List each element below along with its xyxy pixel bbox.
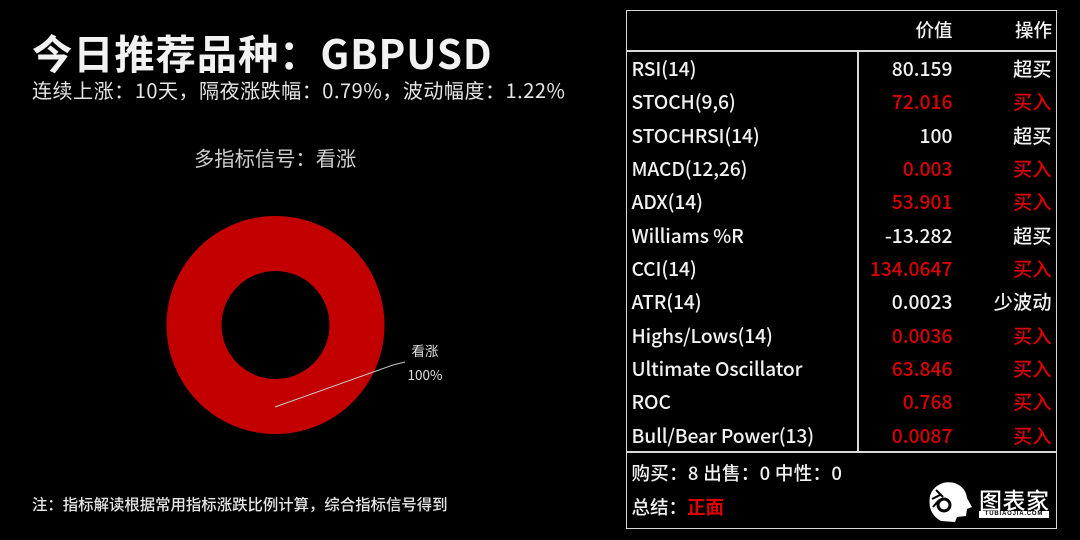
row: CCI: 134.0647 (870, 254, 952, 282)
row: MACD: 0.003 (903, 154, 952, 182)
donut label (408, 340, 442, 384)
row: ROC (632, 387, 1052, 415)
row: STOCH: 买入 (1013, 87, 1052, 115)
row: STOCHRSI: 100 (920, 121, 952, 149)
row: Highs/Lows (632, 321, 1052, 349)
row: CCI: CCI(14) (632, 254, 697, 282)
column heading: action: 操作 (1015, 17, 1052, 43)
row: ROC: ROC (632, 387, 671, 415)
row: RSI: 80.159 (892, 54, 952, 82)
row: Ultimate Oscillator (632, 354, 1052, 382)
row: Bull/Bear Power: Bull/Bear Power(13) (632, 421, 814, 449)
row: ATR: ATR(14) (632, 287, 701, 315)
row: ADX: 53.901 (892, 187, 952, 215)
row: Ultimate Oscillator: 63.846 (892, 354, 952, 382)
row: MACD: 买入 (1013, 154, 1052, 182)
row: ADX: ADX(14) (632, 187, 703, 215)
signal counts: 购买：8 出售：0 中性：0 (632, 460, 842, 486)
row: Bull/Bear Power: 0.0087 (892, 421, 952, 449)
row: ADX: 买入 (1013, 187, 1052, 215)
row: Williams: Williams %R (632, 221, 744, 249)
logo url: TUBIAOJIA.COM (985, 511, 1043, 517)
leader line (275, 362, 405, 407)
panel: indicator table (626, 10, 1057, 529)
chart heading: 多指标信号：看涨 (194, 142, 356, 172)
row: ATR (632, 287, 1052, 315)
row: ROC: 0.768 (903, 387, 952, 415)
row: Ultimate Oscillator: Ultimate Oscillator (632, 354, 802, 382)
row: MACD: MACD(12,26) (632, 154, 747, 182)
subtitle statistics: 连续上涨：10天，隔夜涨跌幅：0.79%，波动幅度：1.22% (32, 75, 566, 104)
row: Highs/Lows: Highs/Lows(14) (632, 321, 773, 349)
row: MACD (632, 154, 1052, 182)
footer divider (627, 451, 1056, 452)
row: CCI: 买入 (1013, 254, 1052, 282)
row: ATR: 0.0023 (892, 287, 952, 315)
row: STOCH: STOCH(9,6) (632, 87, 736, 115)
column divider (857, 51, 858, 451)
row: Bull/Bear Power (632, 421, 1052, 449)
row: ADX (632, 187, 1052, 215)
row: Williams: 超买 (1013, 221, 1052, 249)
footnote: 注：指标解读根据常用指标涨跌比例计算，综合指标信号得到 (32, 493, 448, 515)
summary: 总结：正面 (632, 494, 724, 520)
row: STOCH: 72.016 (892, 87, 952, 115)
row: ATR: 少波动 (994, 287, 1052, 315)
row: RSI: RSI(14) (632, 54, 696, 82)
row: STOCHRSI: STOCHRSI(14) (632, 121, 760, 149)
title: 今日推荐品种：GBPUSD (32, 22, 493, 81)
table header dividers (627, 50, 1056, 52)
donut chart (166, 216, 442, 434)
row: ROC: 买入 (1013, 387, 1052, 415)
row: Ultimate Oscillator: 买入 (1013, 354, 1052, 382)
row: RSI (632, 54, 1052, 82)
donut label: 100% (408, 364, 442, 384)
logo: tubiaojia (930, 482, 1050, 522)
column heading: value: 价值 (915, 17, 952, 43)
icon: head (930, 482, 972, 522)
row: RSI: 超买 (1013, 54, 1052, 82)
row: Williams: -13.282 (885, 221, 952, 249)
donut label: 看涨 (412, 340, 439, 360)
row: Highs/Lows: 买入 (1013, 321, 1052, 349)
logo wordmark: 图表家 (979, 482, 1050, 516)
row: STOCHRSI (632, 121, 1052, 149)
row: Bull/Bear Power: 买入 (1013, 421, 1052, 449)
row: Williams (632, 221, 1052, 249)
row: STOCH (632, 87, 1052, 115)
row: Highs/Lows: 0.0036 (892, 321, 952, 349)
row: CCI (632, 254, 1052, 282)
row: STOCHRSI: 超买 (1013, 121, 1052, 149)
